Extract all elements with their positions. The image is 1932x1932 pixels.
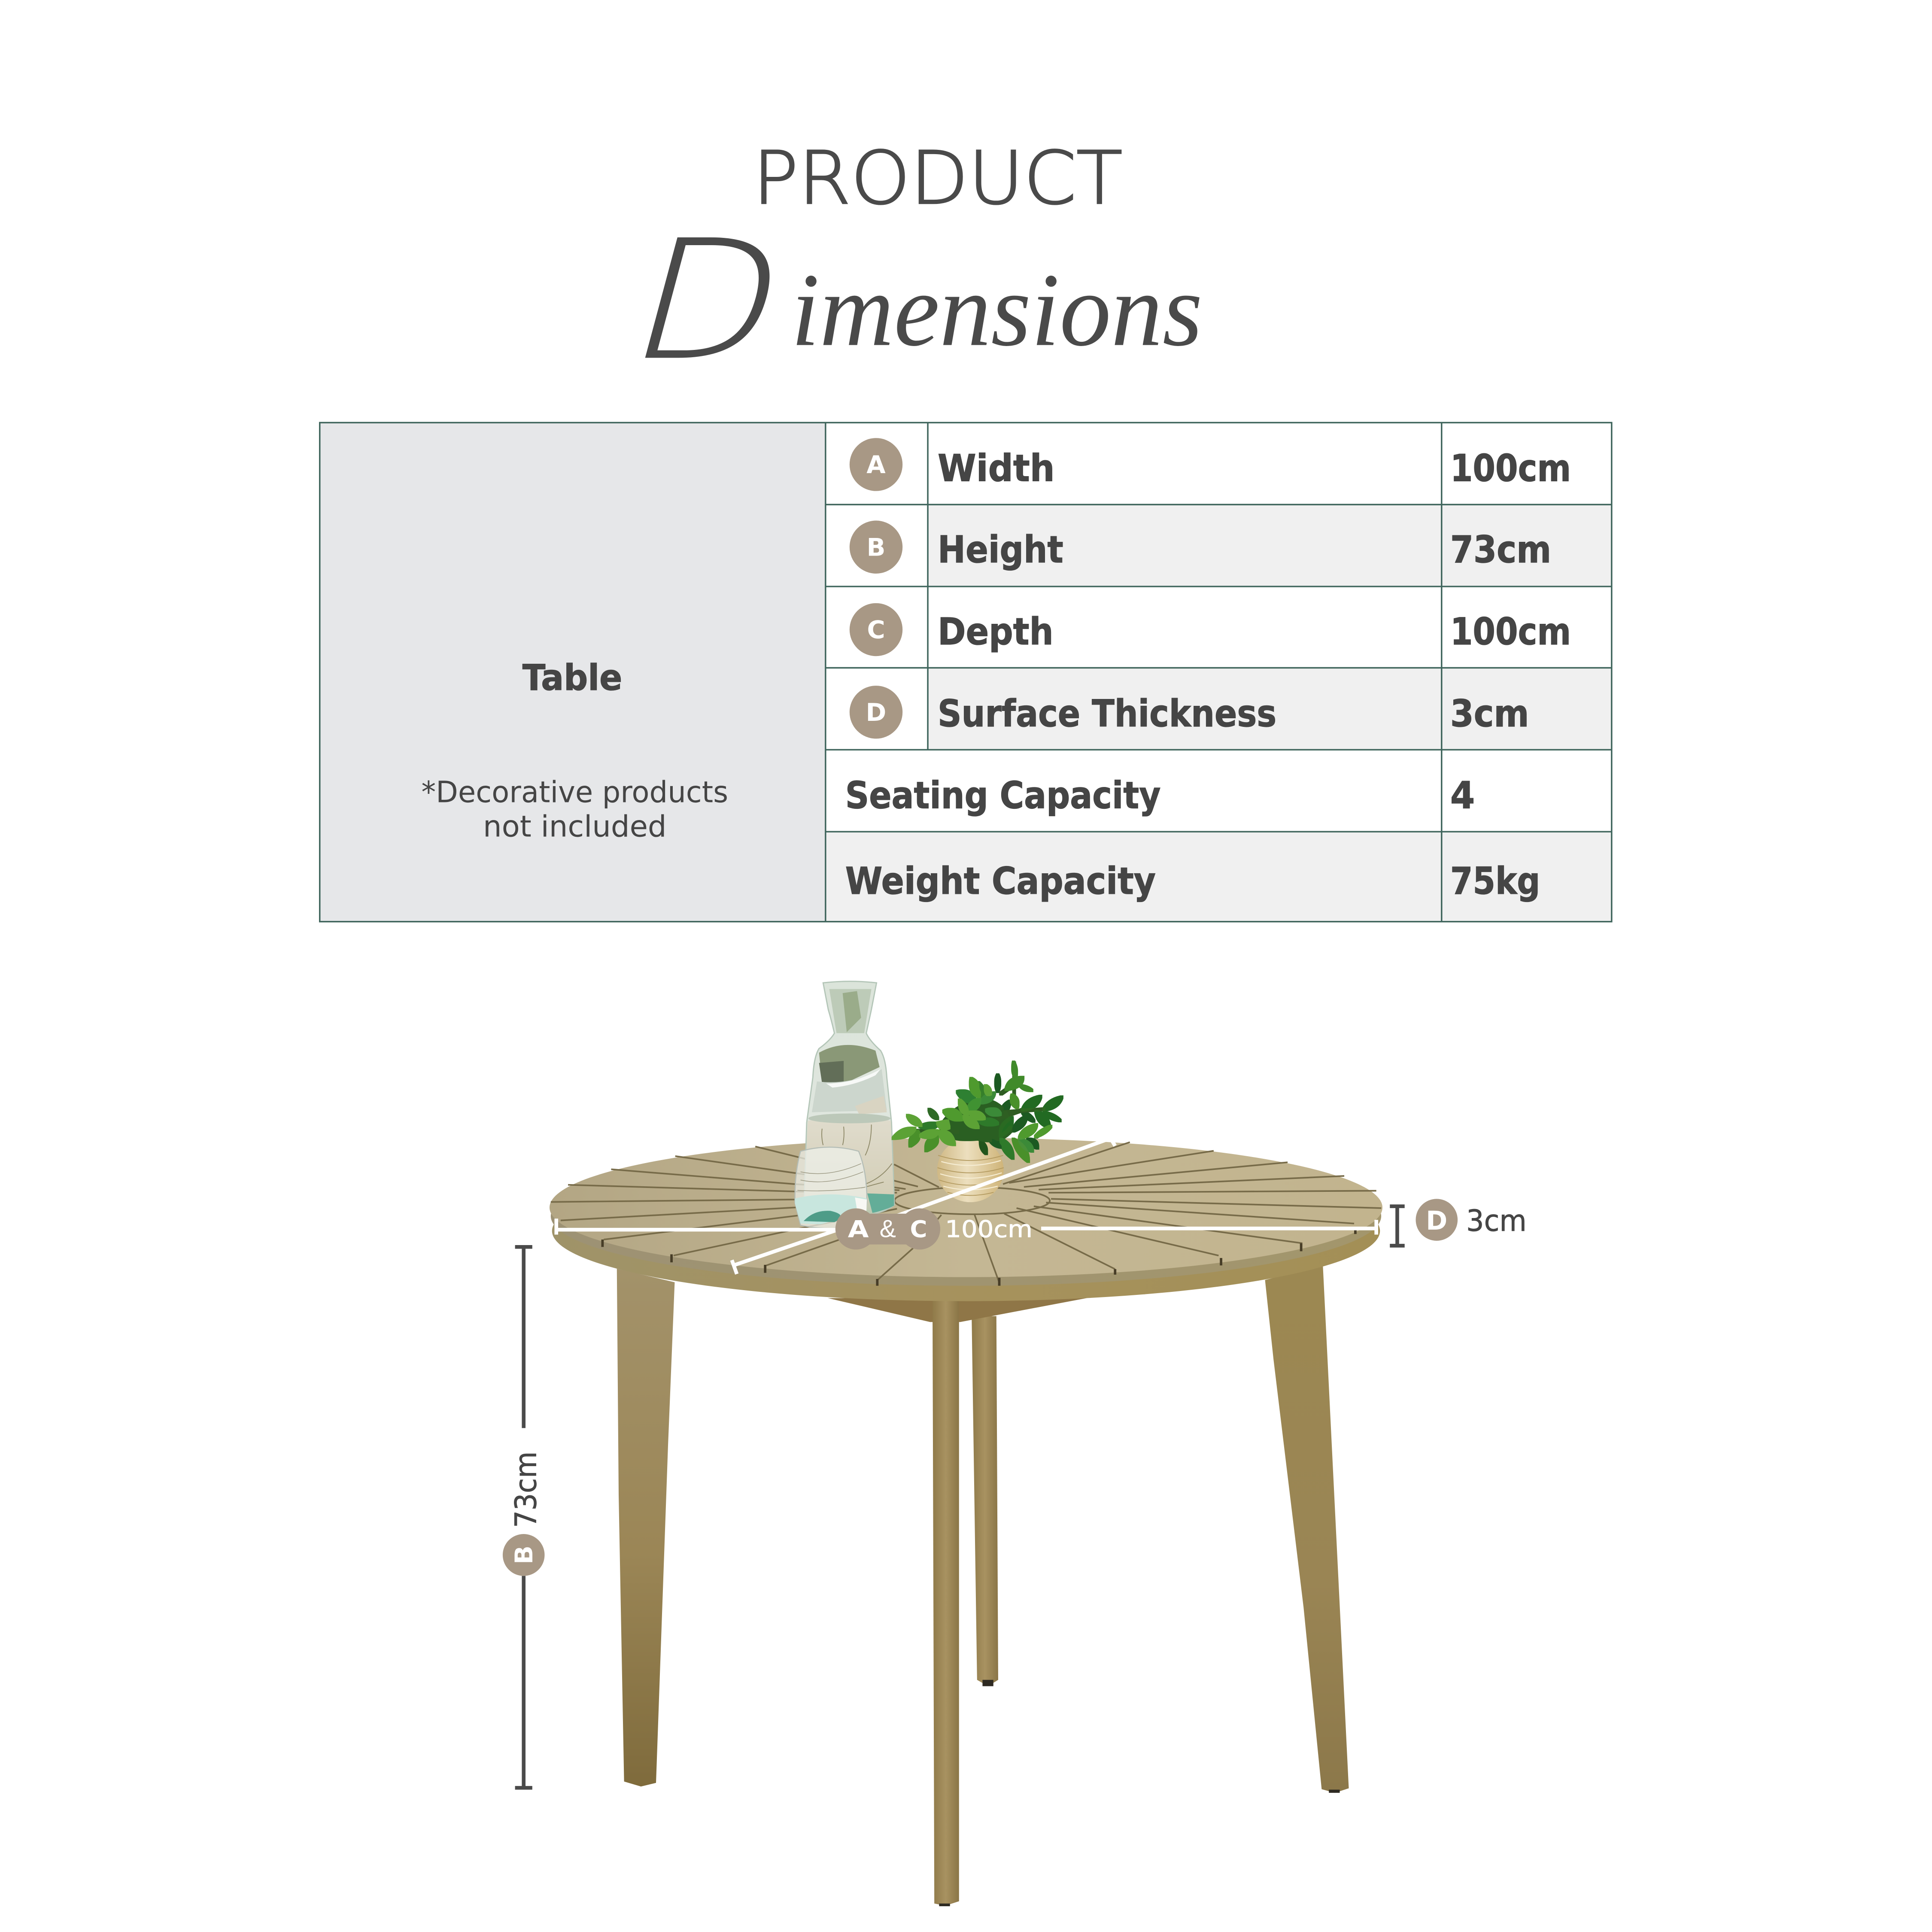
- row: height: [850, 521, 1551, 574]
- title: Dimensions script: imensions: [791, 252, 1203, 368]
- dimension: B height: 73cm: [509, 1452, 543, 1528]
- row: weight capacity: 75kg: [1450, 860, 1540, 903]
- row: surface thickness: 3cm: [1450, 693, 1529, 735]
- row: height: Height: [938, 529, 1063, 571]
- row: surface thickness: [850, 686, 1529, 739]
- specification table: [320, 422, 1612, 922]
- icon: amber vase: [937, 1138, 1004, 1202]
- callout: A & C 100cm: &: [880, 1215, 896, 1242]
- row: depth: C: [867, 616, 885, 644]
- callout: A & C 100cm: 100cm: [945, 1215, 1033, 1242]
- row: seating capacity: Seating Capacity: [845, 775, 1160, 817]
- title: PRODUCT: PRODUCT: [753, 136, 1122, 221]
- row: depth: [850, 603, 1571, 656]
- icon: table rim: [552, 1160, 1380, 1301]
- dimension: D surface thickness: [1390, 1199, 1527, 1247]
- icon: apron: [828, 1298, 1087, 1322]
- icon: slat gaps: [551, 1142, 1381, 1283]
- icon: back leg: [972, 1316, 998, 1686]
- dimension: D surface thickness: 3cm: [1466, 1204, 1527, 1238]
- callout: A & C 100cm: A: [848, 1215, 869, 1242]
- objects on the table: [795, 981, 1062, 1228]
- title: Dimensions script: D: [613, 205, 806, 396]
- row: width: Width: [938, 447, 1055, 490]
- icon: green plant: [893, 1062, 1062, 1161]
- panel: table name cell: *Decorative products: [422, 775, 728, 809]
- dimension: D surface thickness: D: [1426, 1206, 1447, 1236]
- row: height: B: [867, 533, 885, 562]
- icon: glass carafe: [804, 981, 894, 1221]
- dimension: B height: [503, 1247, 544, 1788]
- row: weight capacity: [845, 860, 1540, 903]
- title: Dimensions script: [613, 205, 1203, 396]
- row: depth: 100cm: [1450, 611, 1571, 653]
- row: seating capacity: 4: [1450, 775, 1475, 817]
- panel: table name cell: Table: [522, 657, 622, 699]
- dimension lines A and C: [556, 1140, 1376, 1274]
- icon: table surface: [550, 1138, 1382, 1277]
- icon: left leg: [617, 1269, 674, 1786]
- row: width: [850, 438, 1571, 491]
- row: width: 100cm: [1450, 447, 1571, 490]
- table illustration: legs: [617, 1265, 1349, 1906]
- table illustration: top: [550, 1138, 1382, 1301]
- icon: plank edge: [551, 1146, 1381, 1286]
- panel: table name cell: not included: [483, 810, 667, 844]
- icon: front leg: [933, 1300, 959, 1906]
- row: height: 73cm: [1450, 529, 1551, 571]
- callout: A & C 100cm: C: [910, 1215, 927, 1242]
- row: surface thickness: D: [866, 698, 886, 727]
- callout: A & C 100cm: [835, 1209, 1033, 1249]
- row: weight capacity: Weight Capacity: [845, 860, 1156, 903]
- row: width: A: [866, 450, 886, 479]
- row: seating capacity: [845, 775, 1475, 817]
- dimension: B height: B: [510, 1546, 538, 1564]
- icon: drinking glass: [795, 1147, 867, 1228]
- row: surface thickness: Surface Thickness: [938, 693, 1276, 735]
- panel: table name cell: [320, 422, 826, 922]
- row: depth: Depth: [938, 611, 1054, 653]
- icon: right leg: [1265, 1265, 1349, 1793]
- icon: slat end notches: [602, 1227, 1355, 1286]
